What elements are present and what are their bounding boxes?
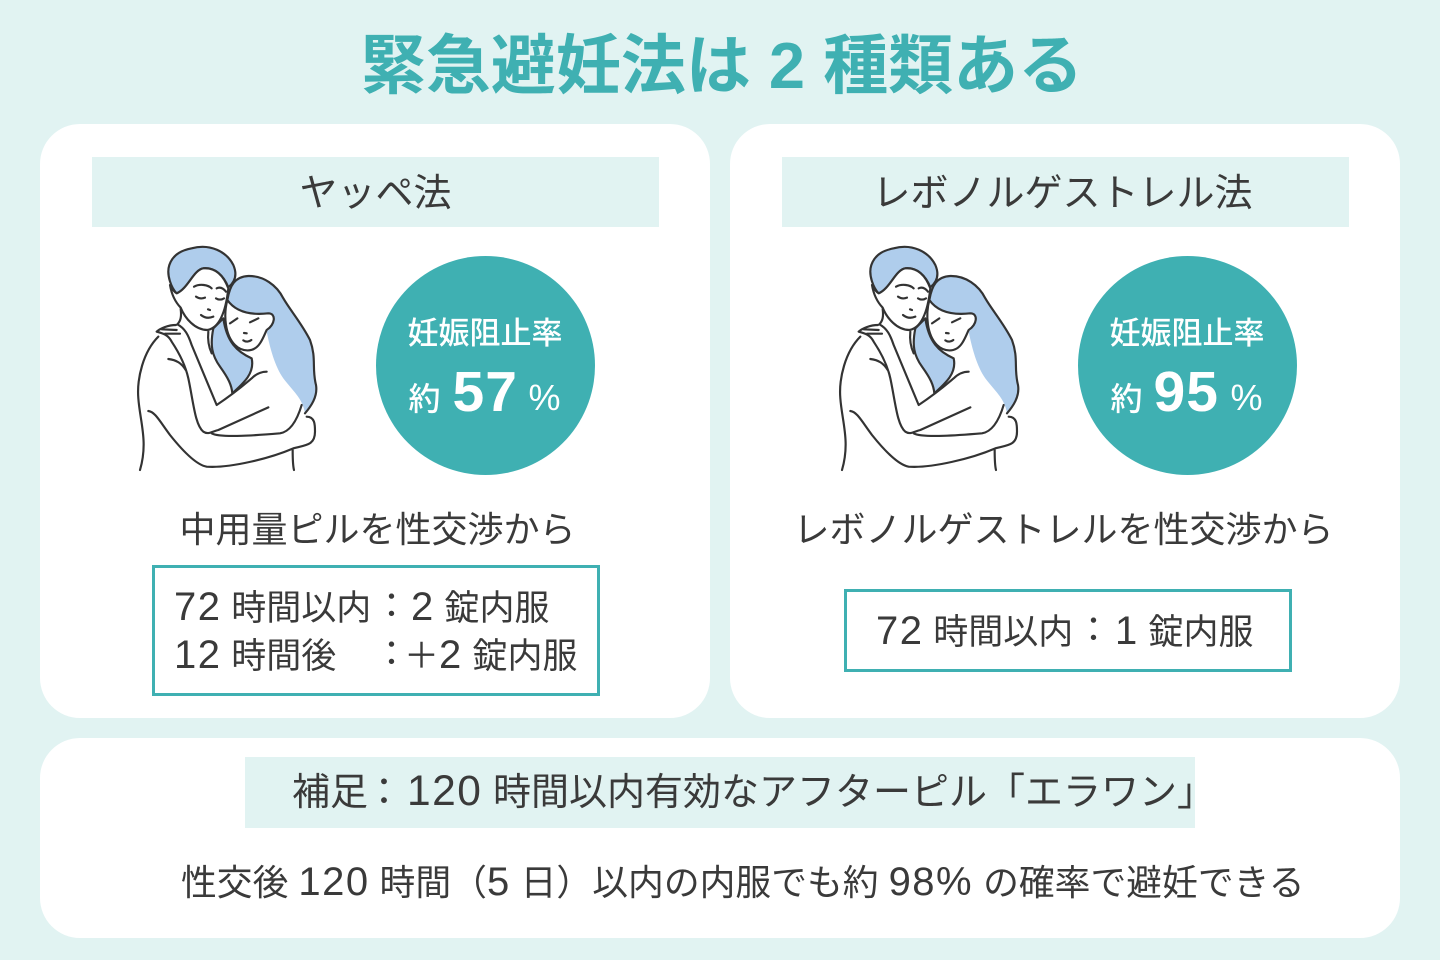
dosage box: 12 時間後 xyxy=(174,633,336,677)
stat circle: 95%: 約 xyxy=(1110,374,1143,420)
supplementary note: 性交後 120 時間（5 日）以内の内服でも約 98% の確率で避妊できる xyxy=(181,860,1305,904)
dosage box: 72 時間以内 xyxy=(876,609,1073,653)
stat circle: 95%: % xyxy=(1230,377,1263,418)
dosage box: 1 錠内服 xyxy=(1115,609,1253,653)
stat circle: 57%: 約 xyxy=(408,374,441,420)
description: 中用量ピルを性交渉から xyxy=(179,509,576,550)
stat circle: 57%: 妊娠阻止率 xyxy=(408,308,562,353)
dosage box xyxy=(152,565,600,696)
dosage box: ： xyxy=(374,587,409,626)
stat circle: 57%: % xyxy=(528,377,561,418)
title: 緊急避妊法は 2 種類ある xyxy=(361,29,1083,102)
heading: レボノルゲストレル法 xyxy=(782,157,1349,227)
dosage box: 2 錠内服 xyxy=(411,585,549,629)
icon: embracing couple xyxy=(136,246,318,472)
stat circle: 57%: 57 xyxy=(452,360,518,424)
panel: レボノルゲストレル法 xyxy=(730,124,1400,718)
dosage box xyxy=(844,589,1292,672)
stat circle: 95% xyxy=(1078,256,1296,475)
heading: 補足: 補足：120 時間以内有効なアフターピル「エラワン」 xyxy=(292,768,1215,815)
panel: 補足 xyxy=(40,738,1400,938)
stat circle: 95%: 95 xyxy=(1154,360,1219,424)
stat circle: 95%: 妊娠阻止率 xyxy=(1110,308,1264,353)
dosage box: ： xyxy=(1076,611,1111,650)
icon: embracing couple xyxy=(838,246,1020,472)
dosage box: ＋2 錠内服 xyxy=(404,633,578,677)
panel: ヤッペ法 xyxy=(40,124,710,718)
dosage box: ： xyxy=(374,635,409,674)
heading: ヤッペ法: ヤッペ法 xyxy=(299,173,452,215)
heading: ヤッペ法 xyxy=(92,157,659,227)
heading: レボノルゲストレル法: レボノルゲストレル法 xyxy=(872,173,1252,215)
stat circle: 57% xyxy=(376,256,594,475)
description: レボノルゲストレルを性交渉から xyxy=(793,509,1334,550)
heading: 補足 xyxy=(245,757,1195,828)
dosage box: 72 時間以内 xyxy=(174,585,371,629)
